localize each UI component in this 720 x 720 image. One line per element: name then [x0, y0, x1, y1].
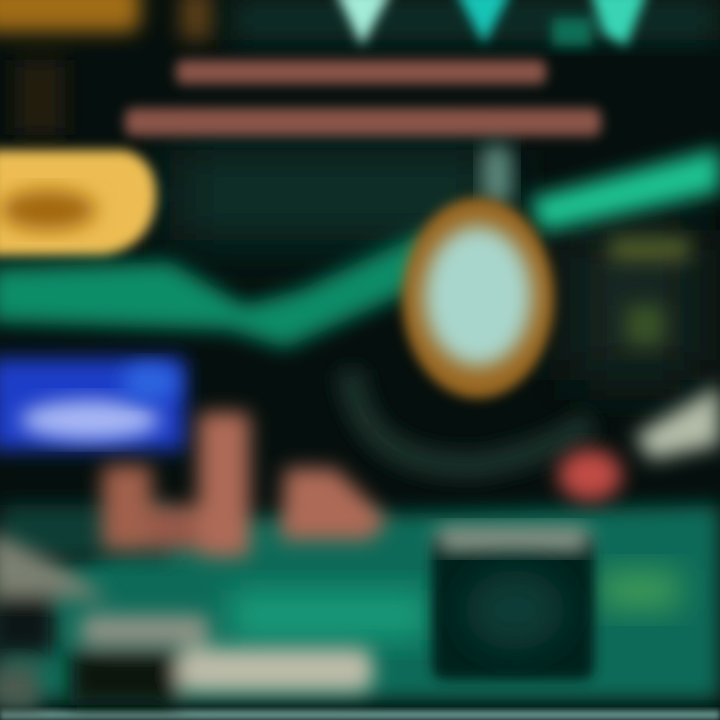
stacked books: [0, 530, 373, 710]
dark box: [432, 526, 594, 680]
pocket watch: [350, 145, 590, 465]
green trend line: [0, 148, 720, 348]
faint right chart marks: [610, 238, 690, 345]
top teal shapes: [335, 0, 648, 46]
pen: [558, 385, 720, 501]
golden bowl: [0, 150, 156, 256]
top left golden glow: [0, 0, 212, 135]
heading: [125, 60, 601, 136]
blue screen: [0, 358, 185, 450]
copper bars: [102, 412, 388, 557]
teal table: [0, 505, 720, 720]
